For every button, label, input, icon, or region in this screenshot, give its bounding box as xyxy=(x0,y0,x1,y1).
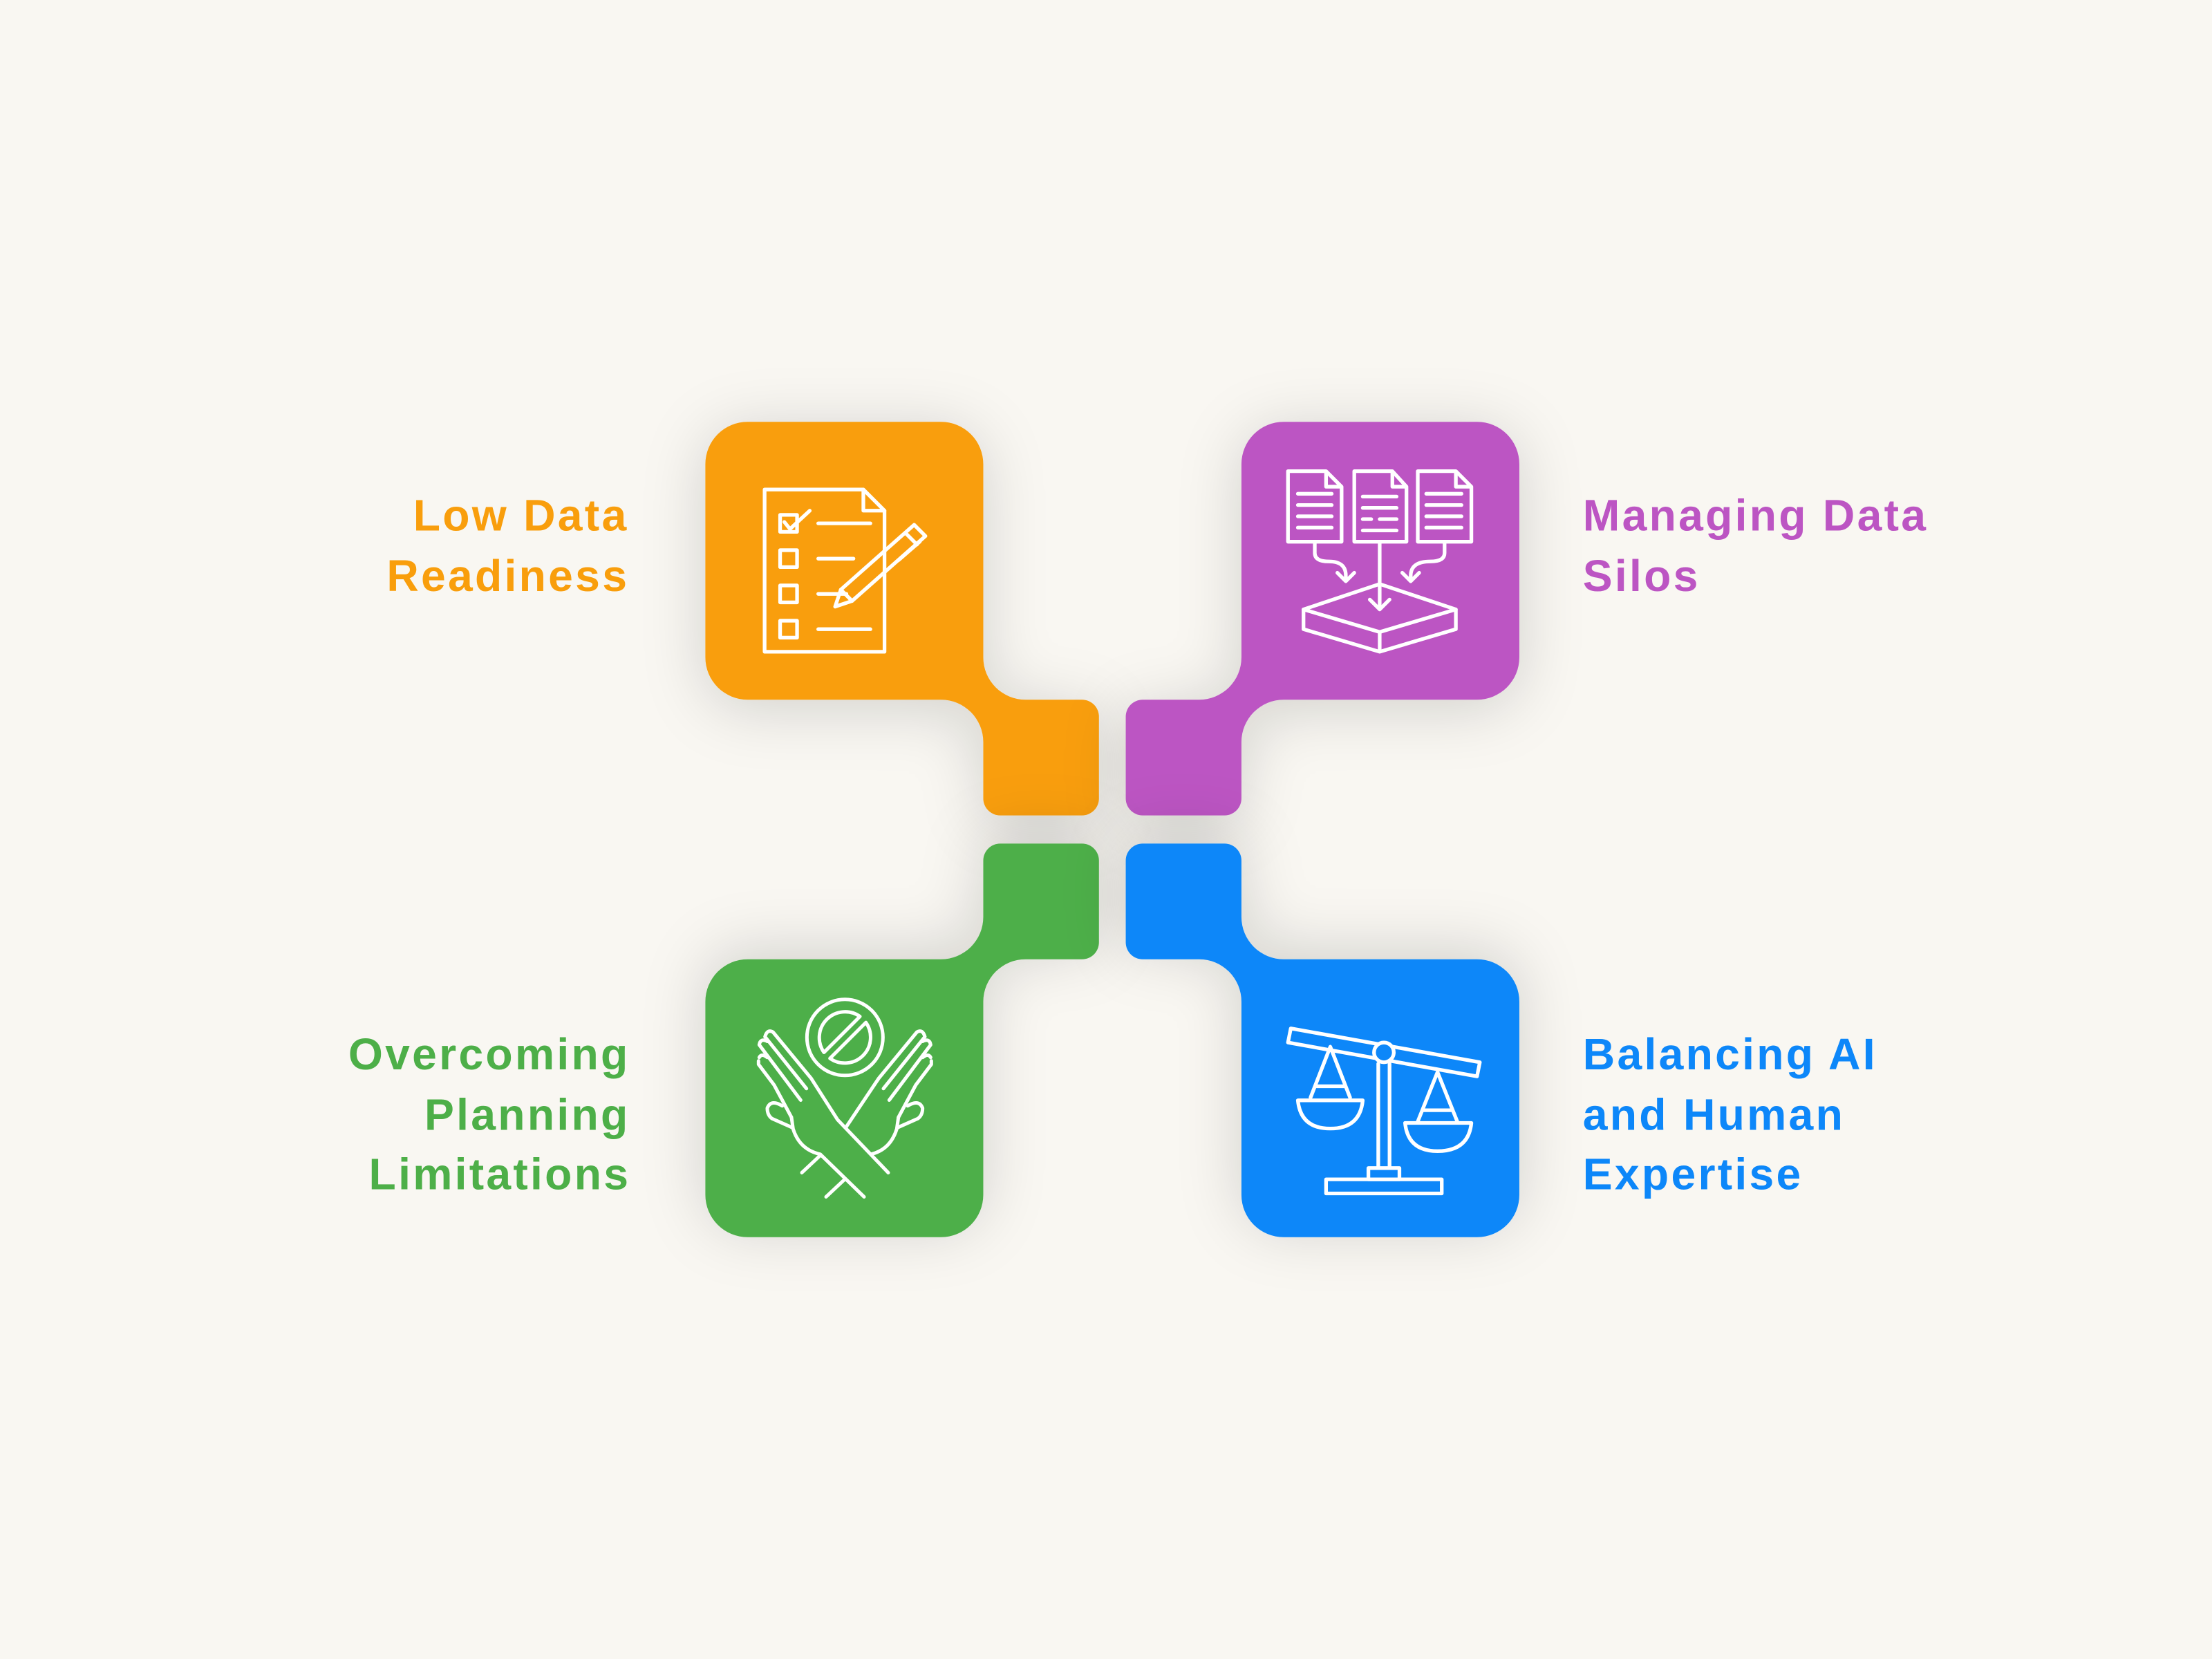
icon: balance scale xyxy=(1288,1029,1480,1194)
text: Low Data Readiness: Low Data xyxy=(413,490,628,540)
text: Overcoming Planning Limitations: Limitations xyxy=(369,1149,630,1199)
icon: documents into storage box xyxy=(1288,471,1472,652)
text: Overcoming Planning Limitations: Overcoming xyxy=(348,1029,630,1079)
panel: overcoming planning limitations (green) xyxy=(705,843,1099,1237)
panel: low data readiness (orange) xyxy=(705,422,1099,816)
panel: balancing AI and human expertise (blue) xyxy=(1126,843,1519,1237)
panel: managing data silos (purple) xyxy=(1126,422,1519,816)
text: Low Data Readiness: Readiness xyxy=(386,551,629,601)
icon: checklist with pencil xyxy=(765,489,926,652)
text: Managing Data Silos: Managing Data xyxy=(1583,490,1928,540)
text: Overcoming Planning Limitations: Planning xyxy=(424,1090,630,1140)
text: Balancing AI and Human Expertise: Expertise xyxy=(1583,1149,1803,1199)
text: Balancing AI and Human Expertise: Balancing AI xyxy=(1583,1029,1877,1079)
text: Managing Data Silos: Silos xyxy=(1583,551,1700,601)
icon: crossed hands with prohibition sign xyxy=(758,1000,931,1197)
text: Balancing AI and Human Expertise: and Human xyxy=(1583,1090,1845,1140)
